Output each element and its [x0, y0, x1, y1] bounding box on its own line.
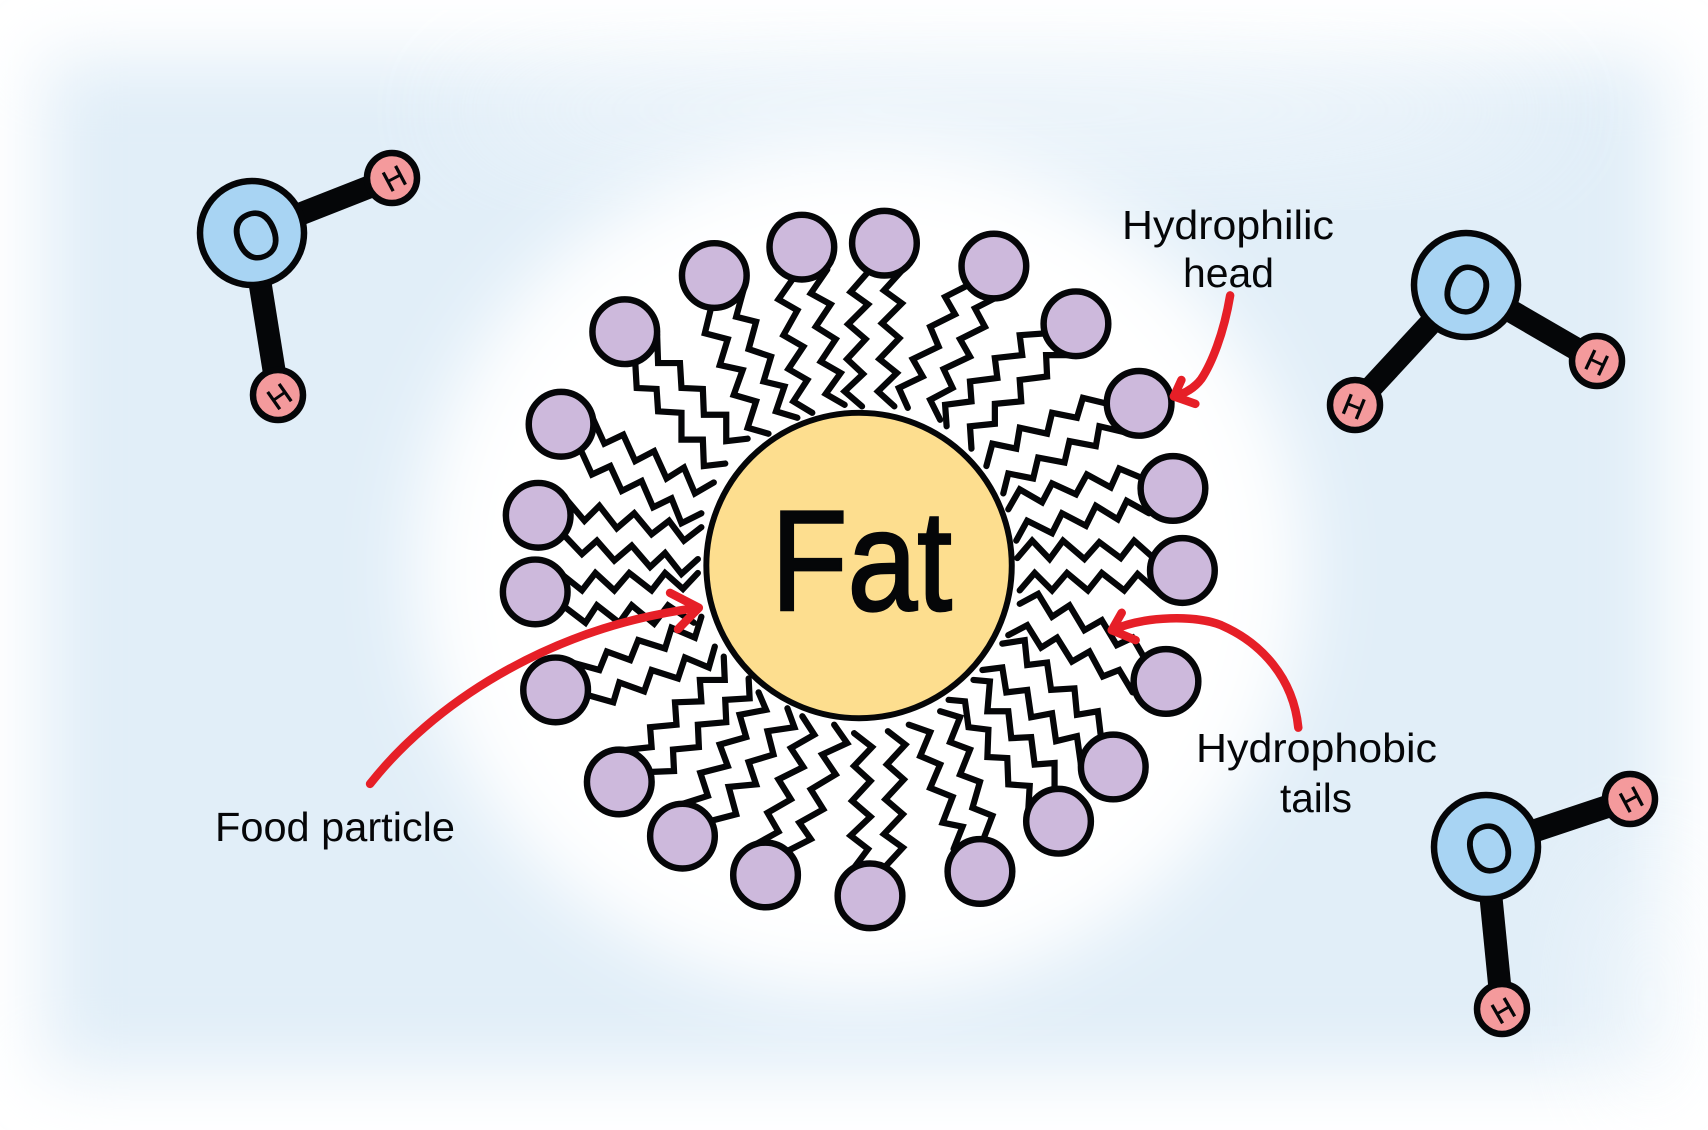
phospholipid 14: [650, 692, 794, 868]
phospholipid 21: [682, 243, 797, 434]
phospholipid 1: [770, 215, 845, 413]
phospholipid 9: [982, 640, 1146, 799]
water molecule: top right: O: [1429, 244, 1504, 336]
water molecule: top left: [200, 153, 417, 420]
phospholipid 17: [503, 560, 698, 624]
label: hydrophobic tails: tails: [1280, 775, 1352, 821]
phospholipid 10: [949, 680, 1091, 854]
phospholipid 11: [909, 711, 1012, 904]
arrow: food particle to fat: [370, 593, 699, 784]
phospholipid 2: [845, 211, 917, 406]
phospholipid 16: [523, 617, 715, 722]
water molecule: top right: H: [1580, 344, 1613, 383]
water molecule: top right: H: [1337, 388, 1370, 427]
fat droplet: [706, 413, 1012, 718]
phospholipid 3: [899, 234, 1026, 420]
phospholipid 4: [945, 291, 1108, 449]
arrow: hydrophobic tails: [1112, 613, 1298, 728]
label: hydrophilic head: Hydrophilic: [1122, 202, 1334, 248]
phospholipid 7: [1017, 538, 1215, 603]
water molecule: bottom right: [1434, 774, 1655, 1034]
water molecule: top left: H: [262, 377, 298, 417]
water molecule: top left: O: [219, 190, 294, 282]
label: hydrophilic head: head: [1183, 250, 1274, 296]
water molecule: top right: [1330, 233, 1622, 430]
water molecule: bottom right: O: [1454, 804, 1525, 894]
fat label: Fat: [771, 482, 952, 641]
phospholipid 13: [733, 716, 847, 907]
micelle: phospholipids surrounding the fat droplet: [503, 211, 1215, 928]
water molecule: top left: H: [377, 160, 412, 199]
label: food particle: Food particle: [215, 804, 455, 850]
water molecule: bottom right: H: [1614, 781, 1649, 820]
arrow: hydrophilic head: [1174, 295, 1230, 404]
phospholipid 15: [587, 657, 750, 814]
phospholipid 5: [986, 371, 1171, 493]
water molecule: bottom right: H: [1486, 992, 1521, 1031]
phospholipid 18: [506, 483, 701, 574]
phospholipid 20: [592, 299, 748, 466]
phospholipid 19: [529, 392, 714, 523]
phospholipid 6: [1008, 456, 1205, 541]
phospholipid 8: [1008, 594, 1198, 714]
phospholipid 12: [838, 731, 905, 928]
label: hydrophobic tails: Hydrophobic: [1196, 725, 1437, 771]
